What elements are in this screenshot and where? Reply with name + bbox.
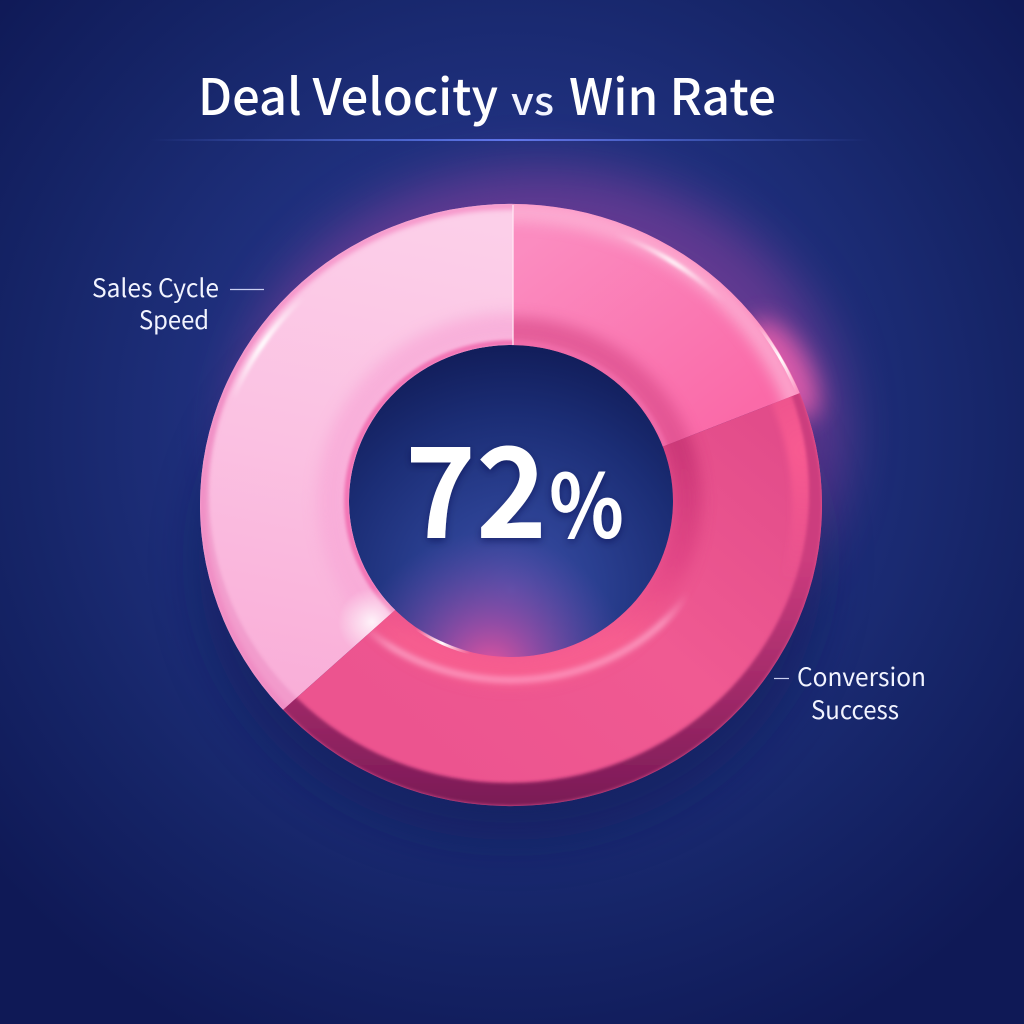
label: conversion success [774, 658, 926, 727]
center value: % [549, 437, 624, 564]
label: conversion success: Success [811, 691, 899, 727]
label: sales cycle speed: Speed [139, 301, 209, 337]
hole edge highlight [348, 344, 674, 658]
purple glow behind the ring [235, 168, 845, 692]
ground shadow [199, 280, 823, 840]
segment: conversion success [283, 393, 822, 806]
segment: sales cycle speed [200, 204, 513, 710]
title: Deal Velocity [198, 58, 498, 130]
title: Win Rate [569, 58, 776, 130]
donut hole [349, 345, 673, 657]
label: conversion success: Conversion [797, 658, 926, 694]
title: vs [511, 71, 554, 126]
title divider [150, 139, 870, 141]
label: sales cycle speed [92, 269, 264, 337]
pink flare at the upper right [731, 309, 833, 431]
segment divider: top [512, 205, 514, 345]
donut chart [194, 142, 870, 838]
center value [405, 393, 624, 575]
title [198, 58, 776, 130]
ring segments [200, 204, 822, 806]
label: sales cycle speed: Sales Cycle [92, 269, 219, 305]
segment: upper right [513, 204, 800, 447]
center value: 72 [405, 393, 547, 575]
